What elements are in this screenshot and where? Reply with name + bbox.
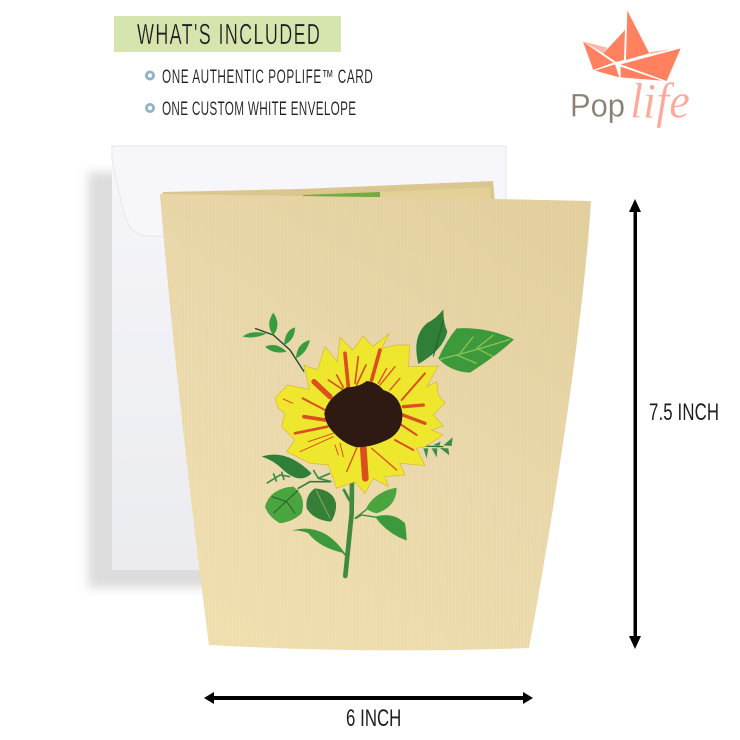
- width arrow: [204, 692, 533, 704]
- card back panel: [160, 181, 495, 202]
- lower left leaves: [262, 455, 345, 553]
- list of included items: [146, 67, 373, 120]
- right sprig: [418, 437, 453, 458]
- envelope shadow: [88, 172, 218, 588]
- envelope flap: [112, 146, 506, 236]
- list item: card: ONE AUTHENTIC POPLIFE™ CARD: [162, 67, 373, 88]
- envelope: [88, 146, 506, 588]
- sunflower illustration: [243, 309, 514, 576]
- logo wordmark: life: [630, 72, 690, 128]
- top right leaves: [416, 309, 514, 373]
- card front: [160, 194, 591, 650]
- sunflower centre: [324, 381, 402, 447]
- stem and branches: [298, 480, 377, 576]
- height arrow: [629, 199, 641, 649]
- heading: what's included: WHAT'S INCLUDED: [137, 19, 320, 51]
- greeting card: [160, 181, 591, 650]
- red streaks: [283, 350, 425, 478]
- width label: 6 INCH: [346, 705, 401, 732]
- envelope body: [112, 146, 506, 570]
- logo wordmark: [570, 72, 690, 128]
- list item: envelope: ONE CUSTOM WHITE ENVELOPE: [162, 99, 356, 120]
- logo icon: origami boat: [583, 11, 681, 81]
- lower right leaves: [366, 488, 407, 541]
- petals: [275, 333, 445, 493]
- upper left sprig: [243, 313, 310, 372]
- logo: Poplife: [570, 11, 690, 128]
- height label: 7.5 INCH: [649, 399, 719, 426]
- logo wordmark: Pop: [570, 87, 625, 124]
